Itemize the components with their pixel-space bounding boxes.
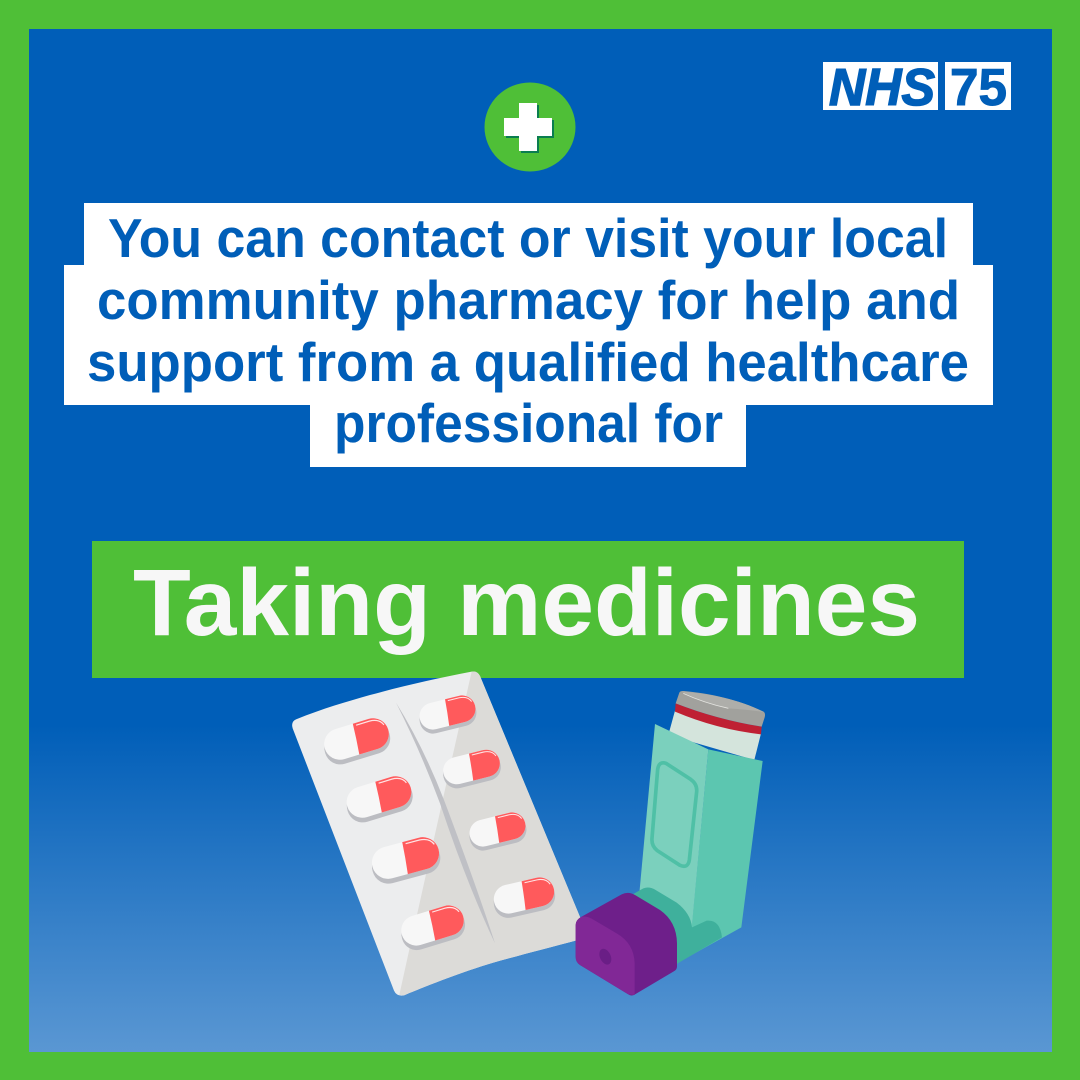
heading: white highlighted intro text: community pharmacy for help and: [97, 269, 960, 331]
capsule 6: [439, 747, 504, 791]
logo: NHS 75: 75: [950, 59, 1007, 117]
icon: pharmacy cross badge: [484, 82, 576, 172]
inhaler body: [633, 724, 763, 964]
capsule 5: [416, 693, 479, 736]
heading: white highlighted intro text: [64, 203, 993, 467]
capsule 2: [342, 772, 417, 826]
icon: blister pack of capsules: [292, 672, 584, 996]
logo: NHS 75: [823, 59, 1011, 117]
capsule 4: [397, 902, 469, 954]
blister foil sheet: [292, 672, 584, 996]
capsule 1: [319, 714, 394, 768]
heading: white highlighted intro text: professional for: [334, 392, 723, 454]
purple mouthpiece: [576, 893, 677, 995]
heading: white highlighted intro text: support from a qualified healthcare: [87, 331, 969, 393]
icon: asthma inhaler: [576, 691, 765, 995]
capsule 8: [490, 875, 558, 921]
banner: Taking medicines: Taking medicines: [133, 550, 920, 656]
canister: [668, 691, 765, 760]
capsule 7: [466, 810, 529, 853]
heading: white highlighted intro text: You can contact or visit your local: [108, 207, 948, 269]
capsule 3: [367, 834, 444, 887]
logo: NHS 75: NHS: [829, 59, 935, 117]
